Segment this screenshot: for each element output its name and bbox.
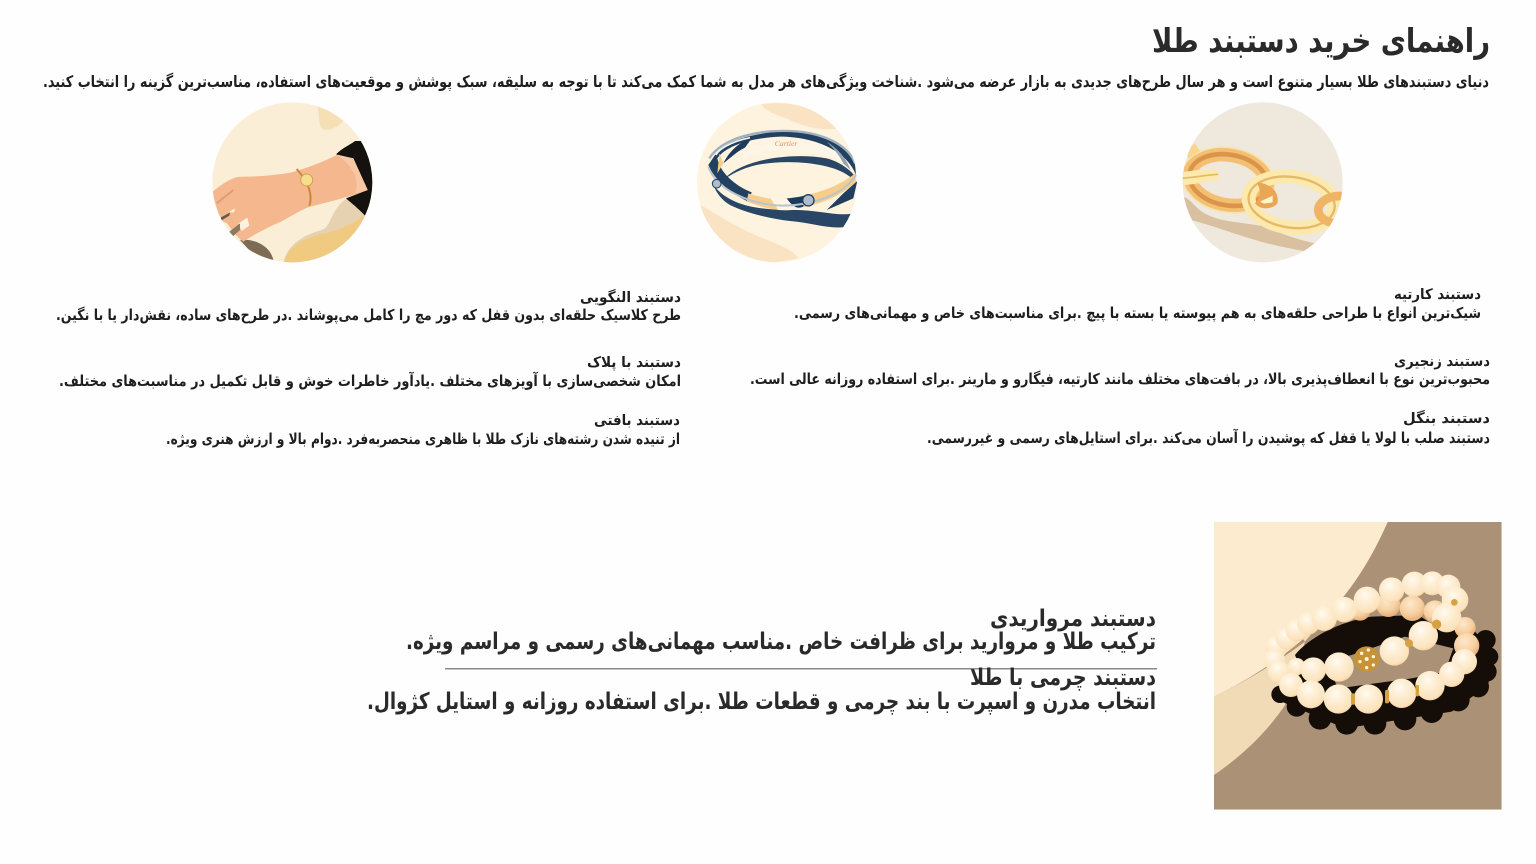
image: pearl bracelet	[1214, 522, 1502, 810]
item: plaque bracelet	[59, 355, 681, 390]
image: cartier bangle	[693, 102, 860, 265]
item: pearl bracelet: ترکیب طلا و مروارید برای ظرافت خاص .مناسب مهمانی‌های رسمی و مراسم ویژه.	[406, 629, 1156, 655]
item: pearl bracelet	[406, 606, 1156, 655]
item: woven bracelet: از تنیده شدن رشته‌های نازک طلا با ظاهری منحصربه‌فرد .دوام بالا و ارزش هنری ویژه.	[166, 430, 680, 448]
item: cartier bracelet	[794, 287, 1481, 323]
item: bangle bracelet: دستبند بنگل	[1403, 409, 1490, 427]
panel: right column bracelet types	[750, 287, 1490, 448]
item: leather bracelet	[367, 665, 1156, 715]
image: gold chain links	[1182, 102, 1343, 262]
item: pearl bracelet: دستبند مرواریدی	[990, 606, 1156, 632]
item: plaque bracelet: دستبند با پلاک	[587, 355, 681, 371]
bangle shadow	[713, 185, 853, 227]
item: bangle ring type: دستبند النگویی	[580, 288, 681, 306]
item: leather bracelet: دستبند چرمی با طلا	[970, 665, 1156, 691]
item: chain bracelet: دستبند زنجیری	[1394, 354, 1490, 370]
item: bangle bracelet	[927, 409, 1490, 448]
image: cartier bangle: Cartier	[775, 139, 797, 148]
item: plaque bracelet: امکان شخصی‌سازی با آویزهای مختلف .یادآور خاطرات خوش و قابل تکمیل در مناسبت‌های مختلف.	[59, 372, 681, 390]
item: chain bracelet	[750, 354, 1490, 389]
item: woven bracelet	[166, 413, 680, 448]
image: hand wearing bangle	[210, 102, 377, 265]
item: bangle ring type	[56, 288, 681, 325]
item: cartier bracelet: دستبند کارتیه	[1394, 287, 1481, 303]
panel: left column bracelet types	[56, 288, 681, 448]
item: woven bracelet: دستبند بافتی	[594, 413, 680, 429]
item: bangle ring type: طرح کلاسیک حلقه‌ای بدون قفل که دور مچ را کامل می‌پوشاند .در طرح‌های ساده، نقش‌دار یا با نگین.	[56, 306, 681, 325]
panel: pearl and leather bracelets	[367, 606, 1157, 715]
item: leather bracelet: انتخاب مدرن و اسپرت با بند چرمی و قطعات طلا .برای استفاده روزانه و استایل کژوال.	[367, 689, 1156, 715]
